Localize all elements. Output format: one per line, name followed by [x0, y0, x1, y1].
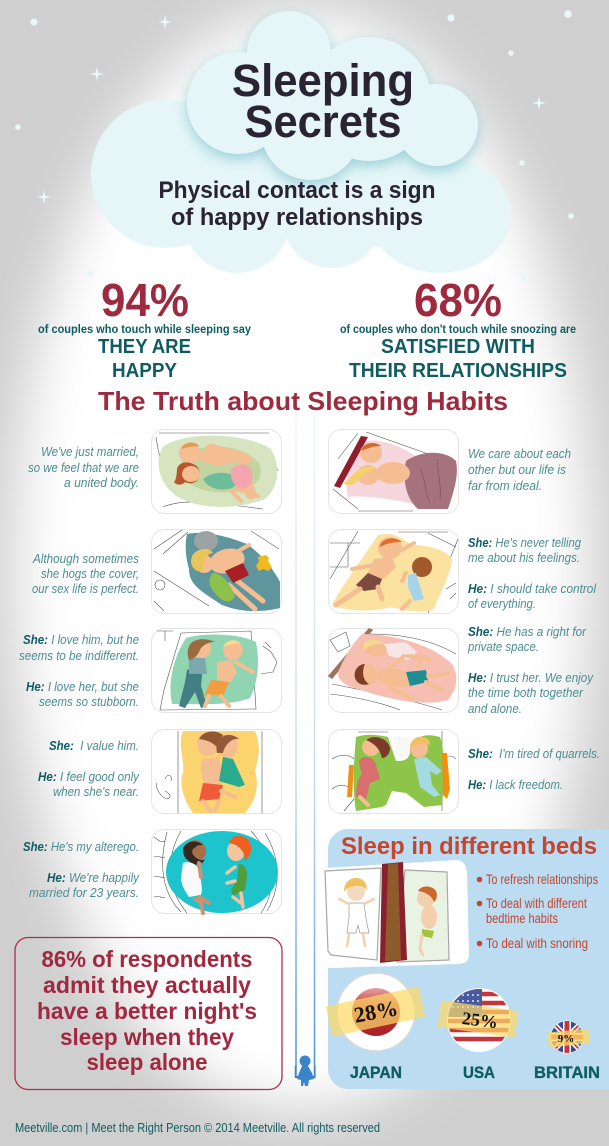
left quote 3: He: I love her, but she: [26, 680, 139, 694]
left quote 5: She: He's my alterego.: [23, 840, 139, 854]
illustration: back-to-side couple green: [152, 628, 282, 712]
stat: 68%: of couples who don't touch while snoozing are: [340, 324, 576, 336]
right quote 1: We care about each: [468, 447, 571, 461]
callout: 86% of respondents: [15, 938, 282, 1090]
country labels: JAPAN: [350, 1063, 402, 1082]
panel: sleep in different beds: [317, 829, 609, 1089]
stat: 94%: THEY ARE: [98, 335, 191, 358]
flag: USA 25%: [438, 987, 518, 1052]
illustration: couple on cyan: [152, 830, 282, 914]
illustration: private space pink: [328, 628, 458, 712]
right quote 2: of everything.: [468, 597, 536, 611]
right quote 1: far from ideal.: [468, 479, 542, 493]
flag: Japan 28%: [326, 973, 425, 1051]
subtitle: of happy relationships: [171, 204, 423, 231]
flag: Britain 9%: [547, 1020, 590, 1054]
country labels: USA: [463, 1063, 495, 1082]
callout: 86% of respondents: admit they actually: [43, 972, 251, 998]
right quote 2: He: I should take control: [468, 582, 597, 596]
illustration: united body couple: [152, 430, 282, 514]
right quote 3: private space.: [467, 640, 539, 654]
cloud: lower: [91, 100, 511, 273]
stat: 94%: HAPPY: [112, 359, 177, 382]
panel heading: Sleep in different beds: [341, 833, 597, 860]
left quote 5: [23, 840, 140, 900]
stat: 94%: of couples who touch while sleeping say: [38, 324, 252, 336]
left quote 1: so we feel that we are: [28, 461, 139, 475]
illustration: spread man yellow: [328, 530, 458, 614]
left quote 1: [28, 445, 139, 490]
stat: 94%: 94%: [101, 274, 189, 326]
right quote 2: She: He's never telling: [468, 536, 581, 550]
callout: 86% of respondents: 86% of respondents: [42, 946, 252, 972]
left quote 3: seems to be indifferent.: [19, 649, 139, 663]
left quote 3: [19, 633, 139, 709]
illustration: woman on top teal: [152, 530, 282, 614]
flag: USA 25%: 25%: [461, 1008, 499, 1032]
right quote 3: She: He has a right for: [468, 625, 587, 639]
subtitle: Physical contact is a sign: [158, 177, 436, 204]
right quote 1: other but our life is: [468, 463, 566, 477]
left quote 4: She: I value him.: [49, 739, 139, 753]
title: Sleeping: [232, 55, 414, 106]
reasons list: bedtime habits: [486, 910, 558, 926]
reasons list: To deal with snoring: [486, 935, 588, 951]
left quote 4: [38, 739, 140, 799]
left quote 1: We've just married,: [41, 445, 139, 459]
heading: truth about sleeping habits: The Truth about Sleeping Habits: [98, 386, 508, 416]
left quote 3: seems so stubborn.: [39, 695, 139, 709]
subtitle: [158, 177, 436, 231]
left quote 4: when she's near.: [53, 785, 139, 799]
callout: 86% of respondents: have a better night's: [37, 998, 257, 1024]
left quote 5: married for 23 years.: [29, 886, 139, 900]
right quote 2: [468, 536, 597, 611]
illustration: back to back yellow: [152, 730, 282, 814]
left quote 3: She: I love him, but he: [23, 633, 139, 647]
illustration: couple under blanket: [328, 430, 458, 514]
left quote 1: a united body.: [64, 476, 139, 490]
right quote 4: [468, 747, 600, 792]
swing ropes: [296, 410, 314, 1078]
swing girl: [295, 1056, 315, 1086]
flag: Britain 9%: 9%: [558, 1033, 574, 1045]
footer: Meetville.com | Meet the Right Person © 2014 Meetville. All rights reserved: [15, 1120, 380, 1135]
stars: [15, 10, 574, 280]
left quote 2: Although sometimes: [32, 552, 139, 566]
cloud: upper: [187, 11, 478, 180]
left quote 2: [32, 552, 139, 596]
right quote 2: me about his feelings.: [468, 551, 580, 565]
right quote 1: [468, 447, 571, 493]
right quote 3: [467, 625, 594, 716]
illustration: separate beds: [317, 860, 469, 968]
left quote 4: He: I feel good only: [38, 770, 140, 784]
reasons list: [477, 871, 598, 951]
stat: 68%: THEIR RELATIONSHIPS: [349, 359, 567, 382]
country labels: BRITAIN: [534, 1063, 600, 1082]
stat: 94%: [38, 274, 252, 382]
country labels: [350, 1063, 600, 1082]
illustration: separate sides green: [328, 730, 458, 814]
left quote 2: she hogs the cover,: [41, 567, 139, 581]
flag: Japan 28%: 28%: [352, 995, 400, 1028]
right quote 3: and alone.: [468, 702, 522, 716]
callout: 86% of respondents: sleep when they: [60, 1024, 234, 1050]
left quote 5: He: We're happily: [47, 871, 140, 885]
stat: 68%: [340, 274, 576, 382]
stat: 68%: SATISFIED WITH: [381, 335, 535, 358]
left quote 2: our sex life is perfect.: [32, 582, 139, 596]
stat: 68%: 68%: [414, 274, 502, 326]
right quote 3: the time both together: [468, 686, 584, 700]
right quote 4: She: I'm tired of quarrels.: [468, 747, 600, 761]
title: Secrets: [244, 96, 402, 147]
right quote 3: He: I trust her. We enjoy: [468, 671, 594, 685]
right quote 4: He: I lack freedom.: [468, 778, 563, 792]
title: [232, 55, 414, 147]
callout: 86% of respondents: sleep alone: [86, 1049, 208, 1075]
